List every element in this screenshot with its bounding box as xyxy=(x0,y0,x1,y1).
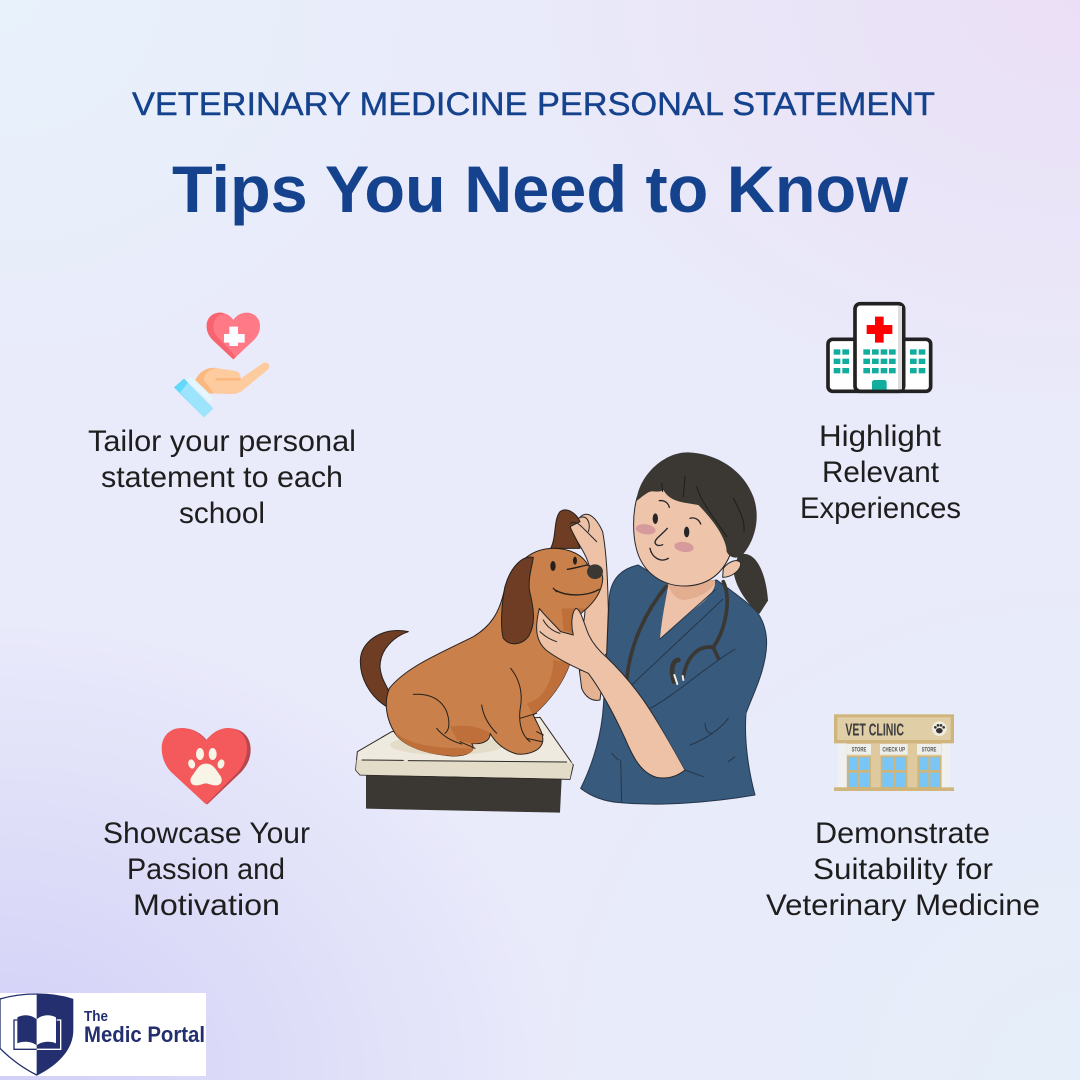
text: tailor tip: Tailor your personal xyxy=(88,425,356,458)
logo: The Medic Portal xyxy=(0,993,206,1076)
sleeve over forearm xyxy=(650,665,746,775)
text: tailor tip: statement to each xyxy=(101,461,343,494)
text: tailor tip: school xyxy=(179,497,265,530)
icon: vet clinic: STORE xyxy=(852,747,866,754)
icon: vet clinic: VET CLINIC xyxy=(845,719,904,739)
vet's face xyxy=(634,480,730,586)
logo: The Medic Portal: Medic Portal xyxy=(84,1022,205,1047)
panel: passion tip xyxy=(103,728,310,922)
icon: heart with paw xyxy=(162,728,251,804)
panel: relevant experiences tip xyxy=(800,304,961,525)
text: relevant experiences tip: Highlight xyxy=(819,420,942,453)
text: passion tip: Passion and xyxy=(127,853,285,886)
text: passion tip: Motivation xyxy=(133,889,280,922)
dog's raised ear xyxy=(551,510,580,548)
dog's tail xyxy=(360,631,408,707)
illustration: vet examining dog xyxy=(356,452,768,813)
icon: hand holding heart xyxy=(174,313,269,417)
vet's body in blue scrubs xyxy=(581,565,767,804)
logo shield xyxy=(0,994,73,1075)
vet's facial features xyxy=(635,501,701,560)
vet's ear xyxy=(723,561,741,577)
dog's body and head xyxy=(386,548,603,756)
panel: suitability tip xyxy=(766,714,1040,922)
text: suitability tip xyxy=(766,817,1040,922)
hair strands xyxy=(662,477,744,537)
vet's forearm shadow piece xyxy=(579,670,603,700)
text: suitability tip: Veterinary Medicine xyxy=(766,889,1040,922)
text: relevant experiences tip xyxy=(800,420,961,525)
icon: vet clinic: CHECK UP xyxy=(882,747,905,754)
logo wordmark: The xyxy=(84,1008,108,1025)
heading: title: Tips You Need to Know xyxy=(172,152,909,226)
text: passion tip xyxy=(103,817,310,922)
vet's hair xyxy=(637,452,757,558)
panel: tailor tip xyxy=(88,313,356,530)
icon: hospital xyxy=(828,304,931,391)
vet's finger detail xyxy=(540,517,597,642)
text: relevant experiences tip: Relevant xyxy=(822,456,940,489)
vet's hand and forearm on dog's chin xyxy=(537,608,685,778)
dog's ear xyxy=(502,557,533,644)
exam table xyxy=(356,717,573,813)
text: suitability tip: Demonstrate xyxy=(815,817,990,850)
text: relevant experiences tip: Experiences xyxy=(800,492,961,525)
icon: vet clinic: STORE xyxy=(922,747,936,754)
text: tailor tip xyxy=(88,425,356,530)
text: suitability tip: Suitability for xyxy=(813,853,993,886)
vet's raised arm behind dog xyxy=(569,514,608,670)
sleeve details xyxy=(650,649,735,777)
text: passion tip: Showcase Your xyxy=(103,817,310,850)
vet's ponytail xyxy=(733,554,768,614)
dog's face xyxy=(550,557,603,595)
stethoscope xyxy=(627,582,727,684)
heading: subtitle: VETERINARY MEDICINE PERSONAL STATEMENT xyxy=(132,86,935,122)
icon: vet clinic xyxy=(834,714,954,791)
